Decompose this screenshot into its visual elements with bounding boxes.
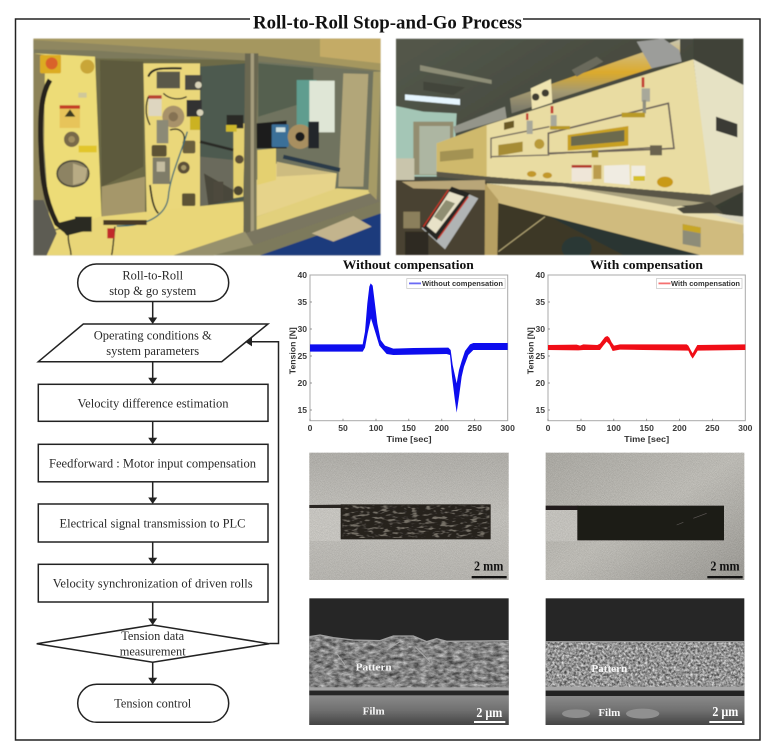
micrographs — [309, 453, 744, 725]
axis labels: 20 — [535, 378, 545, 388]
axis labels: 30 — [297, 324, 307, 334]
axis labels: 30 — [535, 324, 545, 334]
axis labels: 35 — [297, 297, 307, 307]
photo: roll-to-roll machine — [33, 39, 381, 255]
photo: drying oven — [396, 39, 743, 260]
scale bar: 2 mm — [707, 559, 743, 578]
chart heading: without compensation: Without compensation — [343, 257, 475, 272]
legend: Without compensation — [422, 279, 503, 288]
axis labels: 50 — [338, 423, 348, 433]
axis labels: Tension [N] — [288, 327, 298, 374]
axis labels: 250 — [705, 423, 720, 433]
axis labels: 150 — [402, 423, 416, 433]
flowchart labels: Operating conditions & — [94, 328, 212, 342]
scale bar: 2 mm: 2 mm — [474, 559, 503, 574]
SEM labels: with compensation: 2 µm — [712, 704, 738, 719]
flowchart labels: Tension control — [114, 697, 192, 711]
title: Roll-to-Roll Stop-and-Go Process — [253, 14, 522, 34]
axis labels: 100 — [607, 423, 621, 433]
axis labels: 0 — [546, 423, 551, 433]
axis labels: 25 — [297, 351, 307, 361]
axis labels — [526, 270, 753, 444]
axis labels: 300 — [501, 423, 515, 433]
SEM labels: without compensation — [356, 663, 505, 723]
axis labels: 250 — [468, 423, 482, 433]
scale bar: 2 mm: 2 mm — [710, 559, 740, 574]
process box: velocity difference — [38, 384, 268, 421]
axis labels: 25 — [535, 351, 545, 361]
SEM cross-section: without compensation — [309, 598, 509, 725]
flowchart labels — [49, 268, 257, 711]
flowchart labels: Feedforward : Motor input compensation — [49, 456, 257, 470]
axis labels: 15 — [297, 405, 307, 415]
process box: velocity synchronization — [38, 564, 268, 602]
end terminator — [78, 684, 229, 722]
SEM labels: without compensation: Film — [363, 707, 385, 718]
SEM labels: with compensation — [591, 664, 742, 723]
flowchart labels: stop & go system — [109, 284, 196, 298]
axis labels: 0 — [308, 423, 313, 433]
axis labels: 20 — [297, 378, 307, 388]
printed pattern: without compensation — [309, 453, 509, 580]
flowchart labels: Electrical signal transmission to PLC — [60, 517, 246, 531]
axis labels: Tension [N] — [526, 327, 536, 374]
data trace: blue — [310, 283, 508, 413]
chart: tension with compensation — [526, 270, 753, 444]
axis labels: 35 — [535, 297, 545, 307]
SEM labels: with compensation: Film — [598, 708, 621, 719]
axis labels: 15 — [535, 405, 545, 415]
process box: electrical signal — [38, 504, 268, 542]
axis labels: 200 — [672, 423, 687, 433]
flowchart labels: Tension data — [121, 629, 184, 643]
flowchart labels: Velocity difference estimation — [78, 396, 229, 410]
flowchart — [37, 264, 279, 722]
axis labels: 100 — [369, 423, 383, 433]
axis labels: 150 — [640, 423, 654, 433]
SEM labels: without compensation: 2 µm — [476, 705, 502, 720]
flowchart labels: Roll-to-Roll — [122, 268, 183, 282]
flow arrows — [148, 302, 252, 684]
start terminator — [78, 264, 229, 302]
axis labels: Time [sec] — [624, 434, 669, 444]
SEM labels: without compensation: Pattern — [356, 663, 392, 674]
input parallelogram — [38, 324, 268, 362]
axis labels: 40 — [535, 270, 545, 280]
feedback loop line — [250, 342, 278, 644]
flowchart labels: Velocity synchronization of driven rolls — [53, 577, 253, 591]
axis labels — [288, 270, 515, 444]
axis labels: Time [sec] — [386, 434, 432, 444]
flowchart labels: system parameters — [106, 344, 199, 358]
data trace: red — [548, 336, 745, 359]
printed pattern: with compensation — [546, 453, 744, 580]
flowchart labels: measurement — [120, 645, 186, 659]
axis labels: 300 — [738, 423, 753, 433]
chart heading: with compensation: With compensation — [590, 257, 704, 272]
process box: feedforward — [38, 444, 268, 482]
chart: tension without compensation — [288, 270, 515, 444]
decision diamond — [37, 625, 269, 662]
axis labels: 40 — [297, 270, 307, 280]
SEM labels: with compensation: Pattern — [591, 664, 628, 675]
legend: With compensation — [671, 279, 740, 288]
SEM cross-section: with compensation — [546, 598, 744, 725]
axis labels: 50 — [576, 423, 586, 433]
axis labels: 200 — [435, 423, 449, 433]
